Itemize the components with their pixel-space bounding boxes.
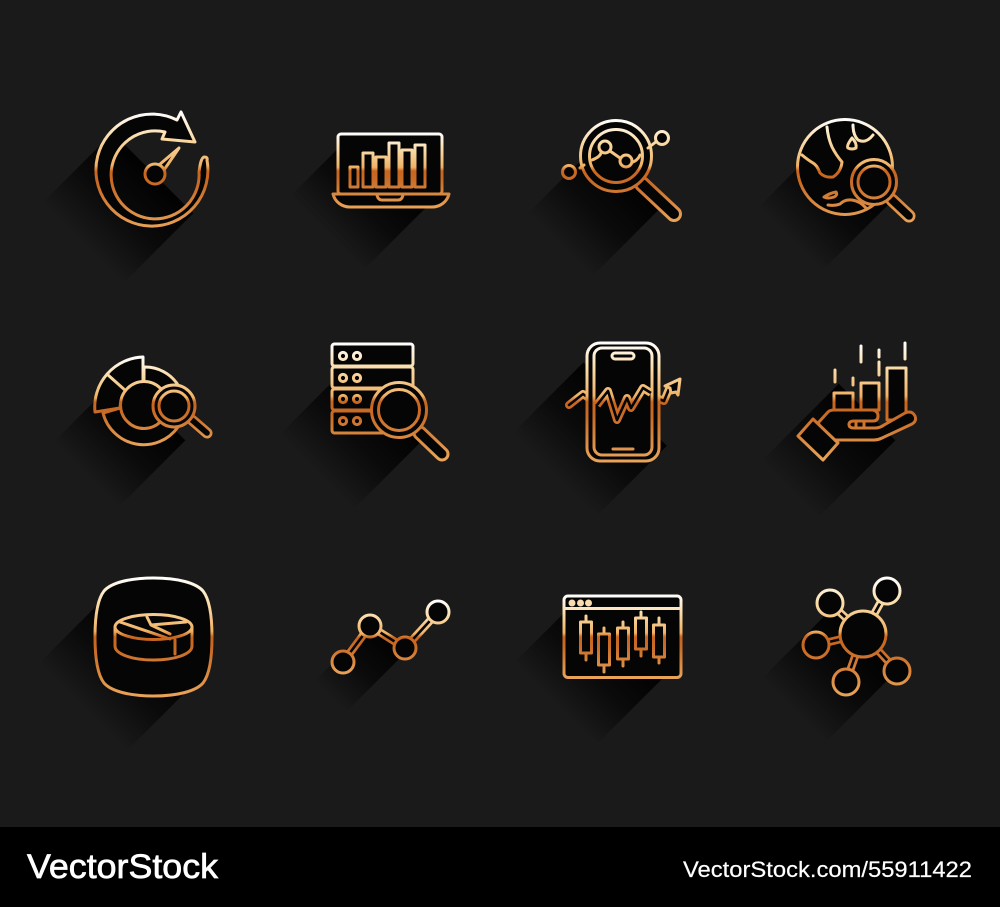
- brand logo text: VectorStock: [27, 848, 219, 886]
- icon: donut chart with magnifier: [95, 357, 207, 445]
- icon: smartphone with stock line: [569, 343, 680, 461]
- icon: laptop with bar chart: [333, 134, 449, 207]
- icon: network hub with five nodes: [803, 578, 910, 695]
- long shadows: [38, 133, 895, 752]
- footer bar: [0, 827, 1000, 907]
- image id url: VectorStock.com/55911422: [683, 857, 972, 882]
- icon: hand holding growing bars: [798, 343, 916, 460]
- icon: server with magnifier: [332, 344, 442, 454]
- icon: speedometer with refresh arrow: [96, 112, 208, 226]
- icon: pie chart in rounded square: [95, 578, 212, 696]
- icon: globe with magnifier: [798, 120, 909, 216]
- icon: line graph with four nodes: [332, 601, 449, 673]
- icon: browser window with candlestick chart: [564, 596, 681, 678]
- icon: magnifier with line graph: [562, 120, 674, 214]
